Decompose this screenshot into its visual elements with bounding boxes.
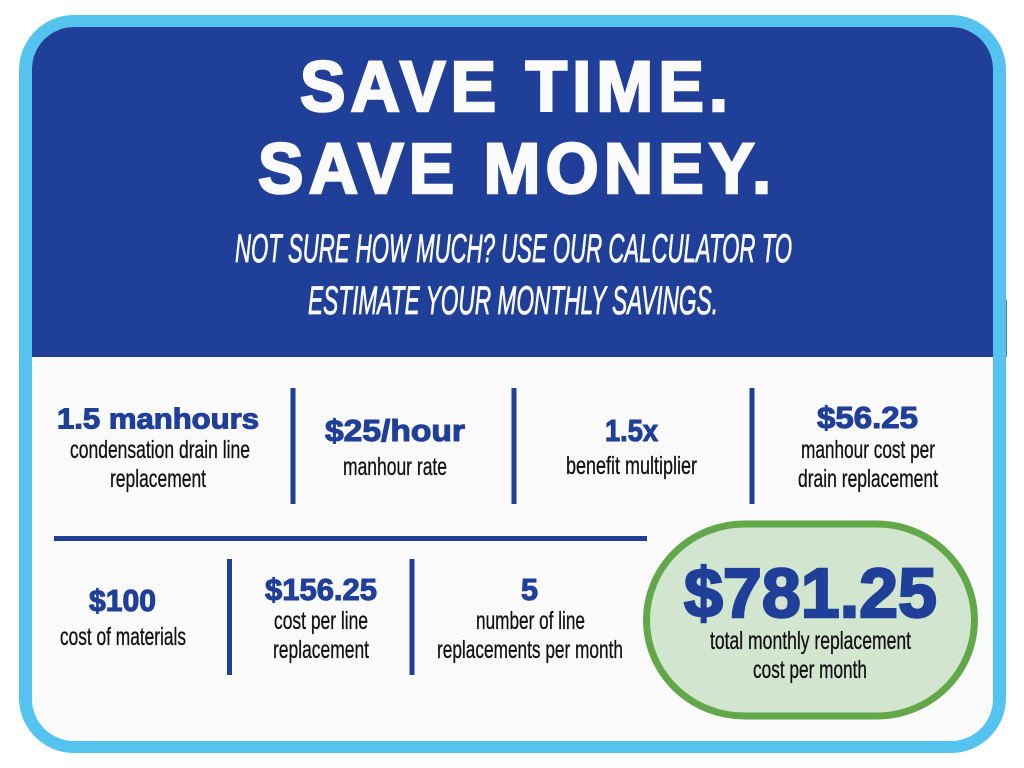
stat: manhour rate bbox=[325, 413, 465, 481]
stat: manhours: condensation drain line bbox=[70, 436, 250, 464]
panel: header background bbox=[32, 27, 993, 357]
stat: replacements per month: number of line bbox=[476, 607, 585, 635]
stat: replacements per month bbox=[437, 572, 623, 664]
stat: cost per line bbox=[265, 572, 377, 664]
dividers bbox=[54, 388, 754, 675]
title bbox=[258, 47, 771, 208]
callout: total cost: $781.25 bbox=[684, 554, 937, 632]
title: SAVE TIME. bbox=[300, 47, 728, 126]
stat: benefit multiplier: benefit multiplier bbox=[566, 452, 697, 480]
stat: cost per line: cost per line bbox=[274, 607, 368, 635]
callout: total cost: cost per month bbox=[753, 656, 867, 684]
stat: manhours bbox=[57, 403, 259, 493]
stat: cost per line: $156.25 bbox=[265, 572, 377, 607]
stat: manhour cost: manhour cost per bbox=[801, 436, 935, 464]
subtitle bbox=[235, 227, 792, 323]
stat: cost per line: replacement bbox=[273, 636, 369, 664]
stat: manhour rate: $25/hour bbox=[325, 413, 465, 448]
stat: replacements per month: replacements per month bbox=[437, 636, 623, 664]
stat: manhours: replacement bbox=[110, 465, 206, 493]
stat: manhour cost: $56.25 bbox=[817, 400, 918, 435]
subtitle: ESTIMATE YOUR MONTHLY SAVINGS. bbox=[308, 279, 718, 323]
stat: manhour cost bbox=[798, 400, 938, 493]
stat: benefit multiplier bbox=[566, 413, 697, 480]
stat: benefit multiplier: 1.5x bbox=[605, 413, 659, 448]
stat: cost of materials bbox=[60, 583, 186, 651]
stat: cost of materials: $100 bbox=[89, 583, 156, 618]
stat: manhour rate: manhour rate bbox=[343, 453, 447, 481]
stat: manhours: 1.5 manhours bbox=[57, 403, 259, 435]
stat: manhour cost: drain replacement bbox=[798, 465, 938, 493]
stat: cost of materials: cost of materials bbox=[60, 623, 186, 651]
stat: replacements per month: 5 bbox=[521, 572, 538, 607]
callout: total cost bbox=[646, 524, 974, 716]
title: SAVE MONEY. bbox=[258, 129, 771, 208]
callout: total cost: total monthly replacement bbox=[710, 627, 911, 655]
